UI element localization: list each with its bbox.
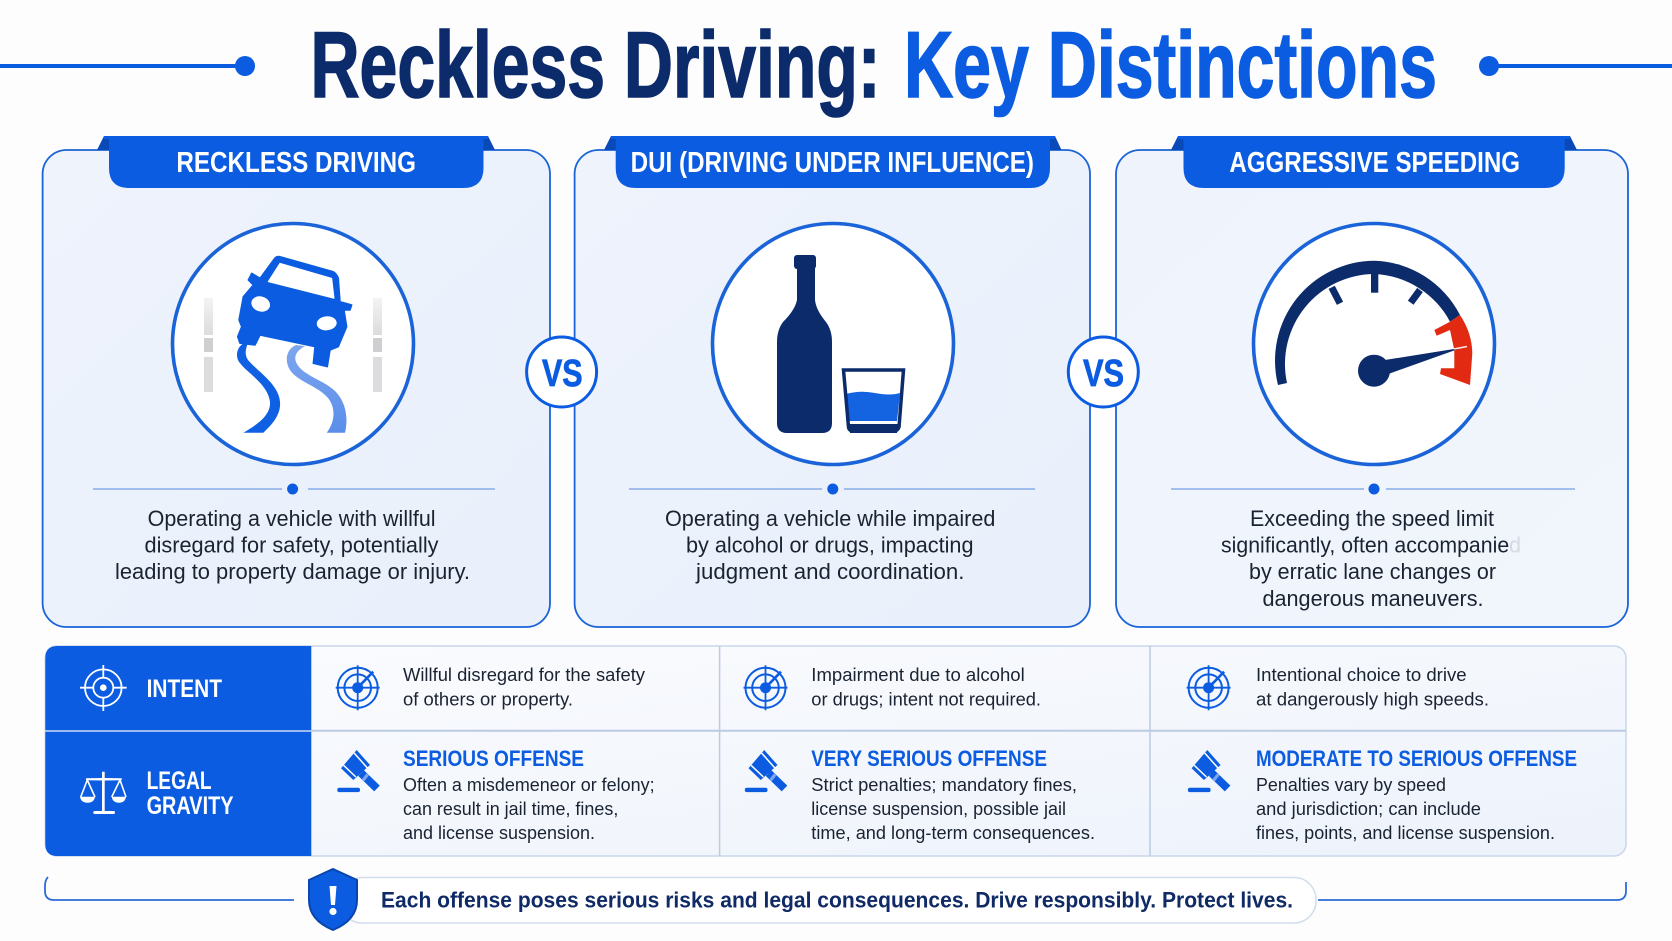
description: DUI: Operating a vehicle while impaired bbox=[665, 506, 995, 531]
cell: gravity, speeding bbox=[1188, 746, 1577, 843]
row header: legal gravity bbox=[45, 730, 311, 856]
cell: intent, DUI bbox=[744, 664, 1041, 710]
heading tab: reckless driving bbox=[97, 136, 495, 188]
icon: skidding car bbox=[172, 224, 414, 464]
cell: gravity, DUI: time, and long-term consequences. bbox=[811, 822, 1095, 843]
cell: intent, reckless driving: Willful disregard for the safety bbox=[403, 664, 646, 685]
cell: gravity, DUI bbox=[745, 746, 1095, 843]
VS badge 2 bbox=[1068, 337, 1138, 407]
cell: gravity, DUI: license suspension, possible jail bbox=[811, 798, 1066, 819]
cell: gravity, speeding: fines, points, and license suspension. bbox=[1256, 822, 1555, 843]
description: aggressive speeding: by erratic lane changes or bbox=[1249, 559, 1496, 584]
description: reckless driving: Operating a vehicle with willful bbox=[148, 506, 436, 531]
cell: gravity, reckless driving: can result in jail time, fines, bbox=[403, 798, 618, 819]
description: reckless driving: disregard for safety, potentially bbox=[144, 533, 438, 558]
title: Key Distinctions bbox=[904, 12, 1437, 117]
heading tab: aggressive speeding: AGGRESSIVE SPEEDING bbox=[1229, 147, 1520, 179]
row header: intent bbox=[45, 646, 311, 730]
VS badge 1 bbox=[527, 337, 597, 407]
icon: warning shield bbox=[309, 869, 357, 930]
description: DUI: by alcohol or drugs, impacting bbox=[686, 533, 974, 558]
cell: intent, speeding: Intentional choice to drive bbox=[1256, 664, 1467, 685]
cell: gravity, reckless driving: and license suspension. bbox=[403, 822, 595, 843]
VS badge 2: VS bbox=[1083, 353, 1124, 395]
description: DUI bbox=[665, 506, 995, 584]
icon: bottle and glass bbox=[712, 224, 954, 464]
cell: gravity, speeding: MODERATE TO SERIOUS OFFENSE bbox=[1256, 746, 1577, 771]
footer callout bbox=[309, 869, 1316, 930]
cell: intent, speeding bbox=[1187, 664, 1489, 710]
divider with dot bbox=[93, 484, 495, 494]
description: DUI: judgment and coordination. bbox=[695, 559, 964, 584]
heading tab: aggressive speeding bbox=[1171, 136, 1577, 188]
description: reckless driving: leading to property damage or injury. bbox=[115, 559, 470, 584]
cell: gravity, DUI: Strict penalties; mandatory fines, bbox=[811, 774, 1077, 795]
cell: intent, reckless driving: of others or property. bbox=[403, 689, 573, 710]
cell: gravity, speeding: and jurisdiction; can include bbox=[1256, 798, 1481, 819]
description: aggressive speeding: Exceeding the speed limit bbox=[1250, 506, 1494, 531]
cell: intent, speeding: at dangerously high speeds. bbox=[1256, 689, 1489, 710]
comparison table bbox=[45, 646, 1626, 856]
cell: intent, DUI: Impairment due to alcohol bbox=[811, 664, 1025, 685]
cell: gravity, reckless driving: SERIOUS OFFENSE bbox=[403, 746, 584, 771]
footer callout: Each offense poses serious risks and legal consequences. Drive responsibly. Protect lives. bbox=[381, 888, 1293, 913]
row header: legal gravity: GRAVITY bbox=[147, 792, 234, 820]
panel: DUI bbox=[575, 136, 1090, 627]
description: reckless driving bbox=[115, 506, 470, 584]
title: Reckless Driving: bbox=[310, 12, 880, 117]
VS badge 1: VS bbox=[542, 353, 583, 395]
title accent right bbox=[1479, 56, 1672, 76]
panel: reckless driving bbox=[43, 136, 550, 627]
row header: legal gravity: LEGAL bbox=[147, 767, 212, 795]
icon: speedometer bbox=[1254, 224, 1494, 464]
footer brackets bbox=[45, 877, 1626, 900]
description: aggressive speeding bbox=[1221, 506, 1521, 611]
cell: intent, reckless driving bbox=[336, 664, 646, 710]
description: aggressive speeding: significantly, often accompanied bbox=[1221, 533, 1521, 558]
heading tab: reckless driving: RECKLESS DRIVING bbox=[176, 147, 416, 179]
cell: intent, DUI: or drugs; intent not required. bbox=[811, 689, 1041, 710]
cell: gravity, DUI: VERY SERIOUS OFFENSE bbox=[811, 746, 1047, 771]
cell: gravity, speeding: Penalties vary by speed bbox=[1256, 774, 1446, 795]
heading tab: DUI bbox=[604, 136, 1062, 188]
row header: intent: INTENT bbox=[147, 675, 222, 703]
cell: gravity, reckless driving: Often a misdemeneor or felony; bbox=[403, 774, 655, 795]
divider with dot bbox=[1171, 484, 1575, 494]
cell: gravity, reckless driving bbox=[337, 746, 655, 843]
divider with dot bbox=[629, 484, 1035, 494]
description: aggressive speeding: dangerous maneuvers. bbox=[1262, 586, 1484, 611]
title accent left bbox=[0, 56, 255, 76]
heading tab: DUI: DUI (DRIVING UNDER INFLUENCE) bbox=[631, 147, 1034, 179]
panel: aggressive speeding bbox=[1116, 136, 1628, 627]
